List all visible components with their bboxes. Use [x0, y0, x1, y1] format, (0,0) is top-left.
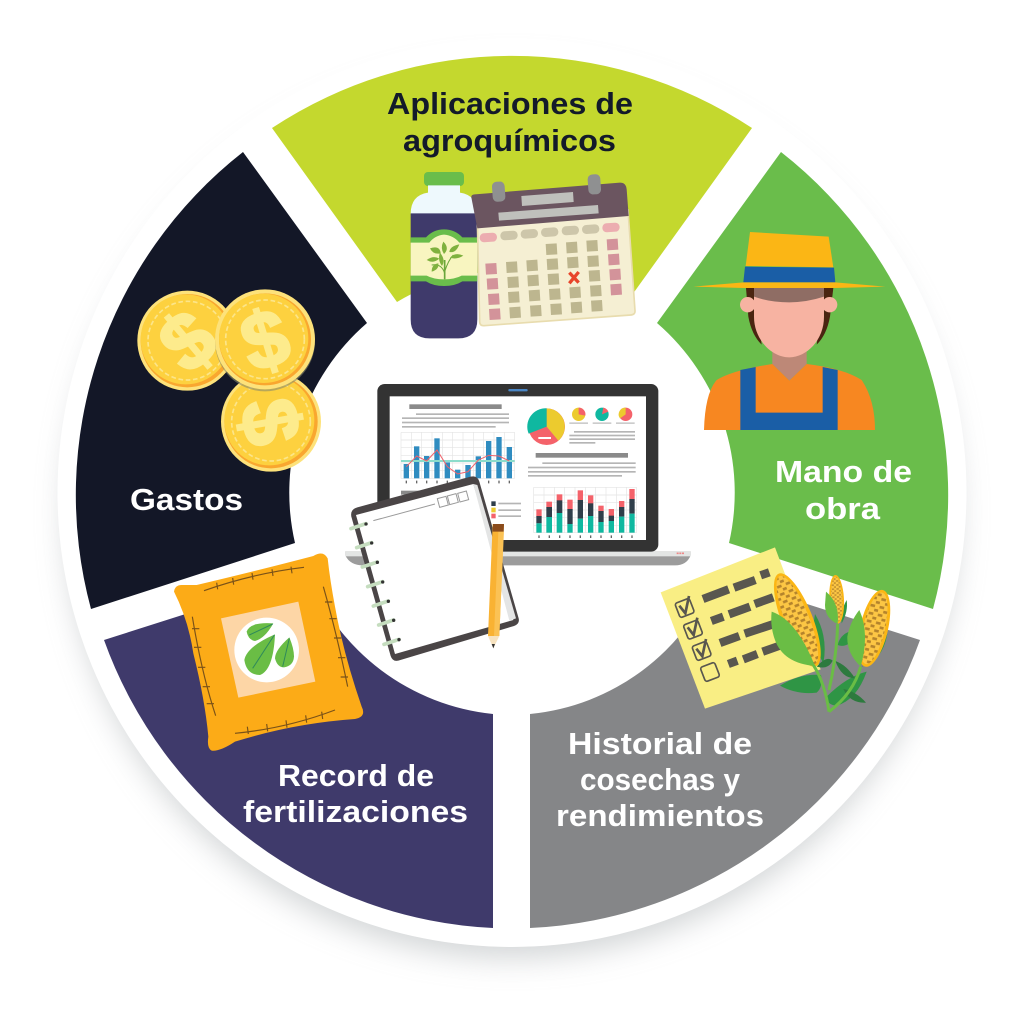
checkboxes	[675, 598, 720, 682]
legend	[491, 501, 496, 518]
hat	[693, 232, 885, 288]
header line and boxes	[373, 504, 435, 521]
coin left: $	[142, 293, 233, 389]
heading: obra: obra	[805, 491, 881, 526]
plant	[427, 242, 463, 279]
calendar paper	[477, 210, 635, 326]
icon: fertilizer bag	[174, 553, 363, 751]
heading: historial: Historial de	[568, 726, 752, 761]
check marks	[679, 596, 706, 656]
stems and light leaves	[771, 592, 865, 712]
laptop screen	[390, 396, 646, 540]
icon: farmer	[693, 232, 885, 430]
heading: rendimientos: rendimientos	[556, 798, 764, 833]
bottle top	[411, 185, 477, 214]
icon: coins	[137, 289, 321, 472]
icon: checklist note	[661, 547, 821, 709]
small pie charts	[572, 408, 632, 421]
large pie chart	[527, 408, 565, 445]
note paper	[661, 547, 821, 709]
corn cobs	[765, 568, 830, 672]
icon: notebook and pencil	[351, 476, 519, 661]
heading: record de: Record de	[278, 758, 434, 793]
calendar rings	[492, 181, 506, 202]
notebook cover	[351, 476, 519, 661]
heading: gastos: Gastos	[130, 482, 243, 517]
icon: bottle	[411, 172, 477, 338]
panel: aplicaciones de agroquímicos	[272, 56, 752, 302]
panel: mano de obra	[657, 152, 948, 609]
bag label	[221, 602, 315, 698]
laptop base	[345, 551, 691, 565]
hair	[746, 288, 833, 345]
bottle label	[411, 229, 477, 286]
screen text	[401, 404, 636, 517]
coin front	[215, 289, 315, 391]
bottle body	[411, 213, 477, 338]
weekday pills	[479, 222, 620, 243]
base buttons	[677, 551, 684, 556]
icon: corn plant	[765, 568, 896, 712]
heading: mano de: Mano de	[775, 454, 912, 489]
overalls	[740, 367, 838, 430]
coin bottom	[221, 372, 321, 472]
ears	[740, 297, 755, 312]
list dashes	[703, 572, 782, 664]
shirt	[704, 364, 875, 430]
panel: gastos	[76, 152, 367, 609]
calendar header	[471, 183, 629, 228]
bottle cap	[424, 172, 464, 186]
red x mark	[569, 272, 579, 283]
coin front: $	[231, 291, 299, 389]
stacked bar chart	[534, 487, 637, 538]
heading: cosechas: cosechas y	[580, 762, 741, 797]
heading: fertilizaciones: fertilizaciones	[243, 794, 468, 829]
dark leaves	[780, 600, 887, 706]
bag body	[174, 553, 363, 751]
stitching	[192, 567, 348, 734]
notebook page	[356, 484, 513, 654]
face	[754, 288, 824, 357]
heading: aplicaciones: Aplicaciones de	[387, 86, 633, 121]
heading: agroquimicos: agroquímicos	[403, 123, 616, 158]
icon: laptop with dashboards	[345, 384, 691, 565]
white disc	[58, 38, 966, 947]
coin bottom: $	[223, 392, 318, 451]
line and bar chart	[401, 432, 515, 483]
icon: calendar	[471, 174, 635, 326]
day squares	[506, 240, 603, 318]
leaves	[244, 623, 294, 675]
panel: record de fertilizaciones	[104, 575, 493, 928]
panel: historial de cosechas	[530, 575, 920, 928]
drop shadow	[66, 66, 958, 958]
spiral rings	[351, 524, 399, 644]
neck	[772, 347, 807, 381]
laptop body	[377, 384, 658, 552]
pencil	[488, 524, 504, 648]
